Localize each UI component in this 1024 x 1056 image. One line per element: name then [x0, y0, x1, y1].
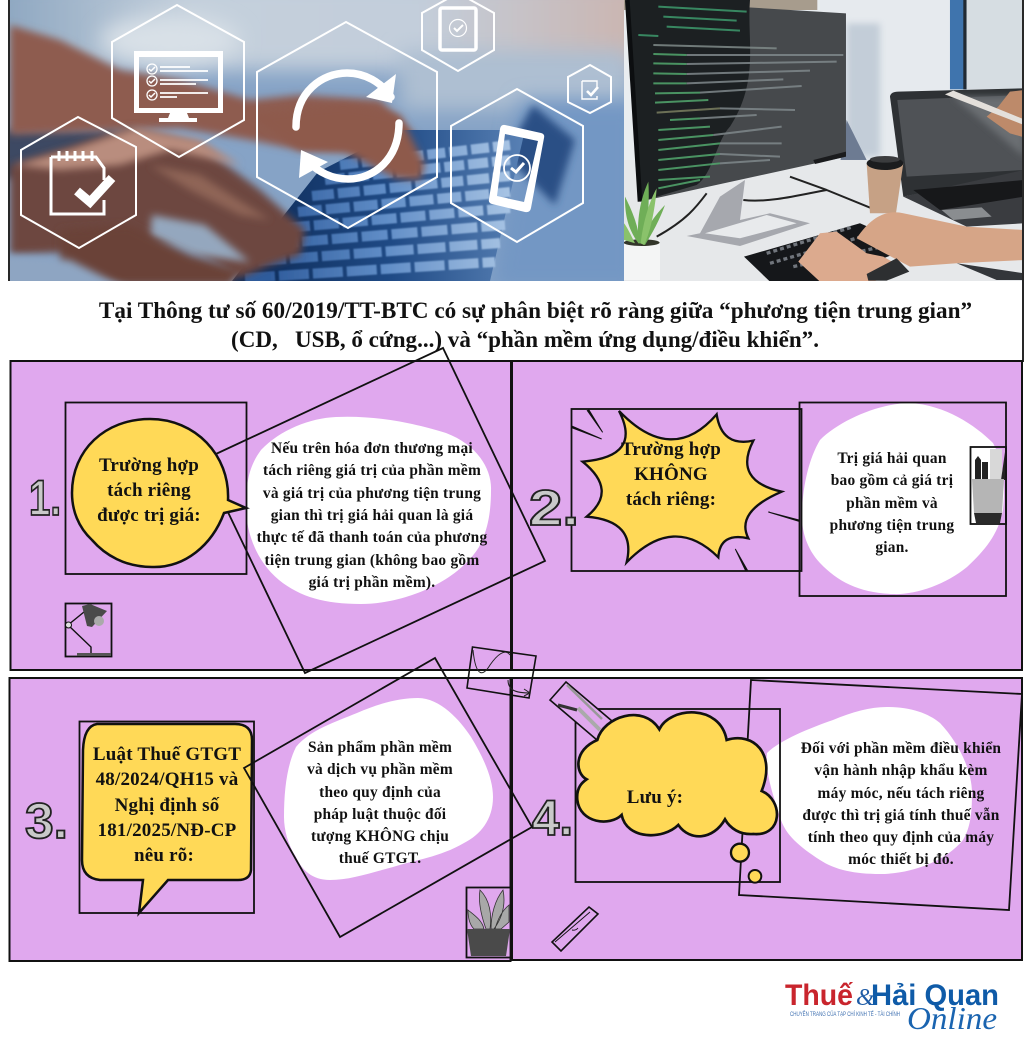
logo: Thuế & Hải Quan Online: Hải Quan: [871, 979, 999, 1012]
body text 2: bao gồm cả giá trị: [831, 472, 954, 489]
starburst callout: Trường hợp: [621, 439, 721, 460]
heading: [99, 298, 972, 352]
body text 1: tiện trung gian (không bao gồm: [265, 552, 479, 569]
thought cloud: Lưu ý:: [627, 787, 683, 808]
number 1: 1.: [29, 470, 61, 526]
speech bubble 3: nêu rõ:: [134, 845, 194, 866]
speech bubble 3: Nghị định số: [115, 795, 220, 816]
heading: (CD, USB, ổ cứng...) và “phần mềm ứng dụng/điều khiển”.: [231, 326, 819, 352]
white text blob 3: [284, 698, 493, 880]
body text 4: vận hành nhập khẩu kèm: [814, 762, 988, 779]
body text 2: phương tiện trung: [830, 517, 954, 534]
body text 2: [830, 450, 954, 556]
body text 1: thực tế đã thanh toán của phương: [257, 529, 487, 546]
body text 1: gian thì trị giá hải quan là giá: [271, 507, 473, 524]
body text 3: thuế GTGT.: [339, 850, 421, 867]
starburst callout: tách riêng:: [626, 489, 716, 510]
number 3: 3.: [25, 793, 68, 849]
rotated frame 4: [739, 680, 1022, 910]
logo: Thuế & Hải Quan Online: [785, 979, 999, 1036]
logo: Thuế & Hải Quan Online: Online: [907, 1000, 997, 1036]
icon: phone hexagon: [451, 89, 583, 242]
frame box 1: [66, 402, 246, 574]
icon: ruler: [552, 907, 598, 951]
body text 4: Đối với phần mềm điều khiển: [801, 740, 1001, 757]
speech bubble 1: [72, 419, 246, 567]
frame box 2a: [572, 409, 802, 571]
starburst callout: [572, 410, 799, 570]
heading: Tại Thông tư số 60/2019/TT-BTC có sự phân biệt rõ ràng giữa “phương tiện trung gian”: [99, 298, 972, 324]
speech bubble 3: Luật Thuế GTGT: [93, 744, 241, 765]
icon: pen cup: [970, 447, 1006, 524]
body text 4: được thì trị giá tính thuế vẫn: [802, 807, 1000, 824]
body text 3: và dịch vụ phần mềm: [307, 761, 453, 778]
icon: clipboard hexagon: [21, 117, 136, 248]
logo: Thuế & Hải Quan Online: Thuế: [785, 979, 853, 1012]
speech bubble 3: [82, 724, 252, 913]
panel 3: VAT law: [10, 658, 532, 961]
frame box 4: [576, 709, 780, 882]
body text 3: pháp luật thuộc đối: [314, 806, 447, 823]
icon: sync hexagon: [257, 22, 437, 228]
logo: Thuế & Hải Quan Online: CHUYÊN TRANG CỦA TẠP CHÍ KINH TẾ - TÀI CHÍNH: [790, 1010, 900, 1018]
body text 4: [801, 740, 1001, 868]
body text 1: giá trị phần mềm).: [309, 574, 435, 591]
body text 1: Nếu trên hóa đơn thương mại: [271, 440, 473, 457]
panel 2: not separated: [512, 361, 1022, 670]
icon: desk lamp: [66, 604, 112, 656]
rotated frame 1: [203, 348, 545, 673]
body text 3: theo quy định của: [319, 784, 441, 801]
logo: Thuế & Hải Quan Online: &: [856, 985, 875, 1011]
body text 3: tượng KHÔNG chịu: [311, 828, 449, 845]
panel 4: note: [512, 678, 1022, 960]
thought cloud: [577, 712, 777, 883]
speech bubble 1: Trường hợp: [99, 455, 199, 476]
starburst callout: KHÔNG: [634, 463, 708, 485]
speech bubble 3: 181/2025/NĐ-CP: [98, 820, 237, 841]
body text 4: máy móc, nếu tách riêng: [818, 785, 985, 802]
speech bubble 1: được trị giá:: [97, 505, 201, 526]
photo: programmer desk with monitor and laptop: [620, 0, 1024, 290]
frame box 3: [80, 722, 254, 913]
icon: plant: [466, 888, 510, 958]
icon: small curve and arrow box: [467, 647, 536, 698]
panel 1: separated value: [10, 348, 545, 673]
number 2: 2.: [529, 480, 579, 536]
body text 1: tách riêng giá trị của phần mềm: [263, 462, 481, 479]
frame box 2b: [800, 402, 1006, 596]
body text 2: phần mềm và: [846, 495, 938, 512]
photo: hands typing on laptop with hexagon icons: [0, 0, 650, 290]
rotated frame 3: [244, 658, 532, 937]
white text blob 4: [767, 707, 972, 874]
icon: monitor hexagon: [112, 5, 244, 157]
body text 4: móc thiết bị đó.: [848, 851, 954, 868]
body text 1: và giá trị của phương tiện trung: [263, 485, 481, 502]
number 4: 4.: [532, 790, 573, 846]
white text blob 1: [246, 417, 491, 604]
speech bubble 1: tách riêng: [107, 480, 191, 501]
icon: small clipboard hexagon: [568, 65, 611, 113]
icon: pens: [550, 682, 612, 740]
body text 2: Trị giá hải quan: [837, 450, 947, 467]
body text 4: tính theo quy định của máy: [808, 829, 994, 846]
body text 2: gian.: [875, 539, 909, 556]
body text 3: Sản phẩm phần mềm: [308, 739, 452, 756]
icon: tablet hexagon: [422, 0, 494, 71]
body text 1: [257, 440, 487, 591]
speech bubble 3: 48/2024/QH15 và: [96, 769, 239, 790]
frame lines: [9, 0, 1023, 362]
white text blob 2: [802, 403, 1004, 594]
body text 3: [307, 739, 453, 867]
